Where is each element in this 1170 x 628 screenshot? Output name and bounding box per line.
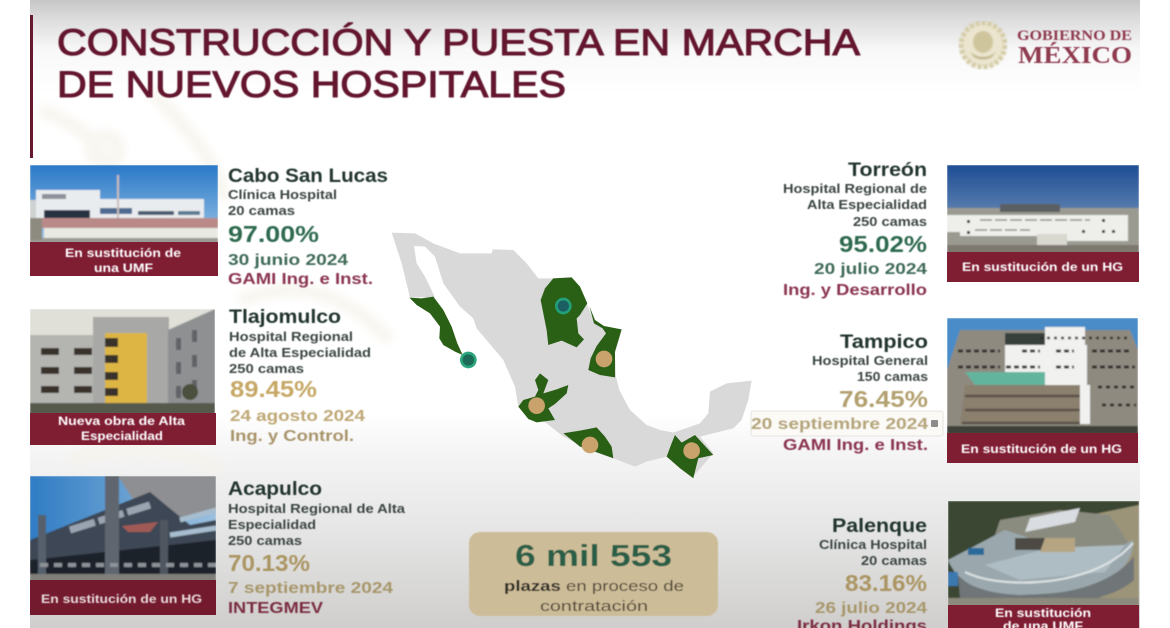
state: Jalisco <box>518 373 568 422</box>
map base <box>392 233 752 477</box>
details <box>797 516 927 628</box>
details: 7 septiembre 2024 <box>228 580 393 597</box>
title: CONSTRUCCIÓN Y PUESTA EN MARCHA <box>57 22 860 63</box>
callout number: 6 mil 553 <box>515 538 672 573</box>
photo: Acapulco hospital <box>30 476 216 581</box>
state: Baja California Sur <box>409 297 463 355</box>
details <box>783 160 927 299</box>
details: 20 julio 2024 <box>814 261 927 278</box>
callout box <box>469 532 718 616</box>
details <box>228 479 406 617</box>
details <box>229 307 371 445</box>
details: 150 camas <box>857 369 928 384</box>
details: 97.00% <box>228 221 319 247</box>
details <box>751 332 928 454</box>
background ornament <box>40 90 390 470</box>
title <box>57 22 860 105</box>
logo: Gobierno de México <box>961 23 1132 69</box>
details: Hospital Regional de <box>783 181 927 196</box>
photo: Palenque hospital <box>948 501 1139 607</box>
details: 95.02% <box>839 231 927 257</box>
caption band <box>30 413 216 445</box>
details: 30 junio 2024 <box>228 252 348 269</box>
marker: Tlajomulco <box>528 397 545 414</box>
title: DE NUEVOS HOSPITALES <box>57 64 566 105</box>
panel: Torreón <box>783 160 1139 299</box>
marker: Torreón <box>555 298 572 314</box>
details: 20 septiembre 2024 <box>751 416 928 433</box>
caption <box>65 246 181 275</box>
details: Hospital Regional de Alta <box>228 501 406 516</box>
photo: Tampico hospital <box>947 318 1138 434</box>
details: Tlajomulco <box>229 307 341 328</box>
logo wordmark: MÉXICO <box>1018 43 1132 69</box>
details: 76.45% <box>839 386 928 412</box>
state: Guerrero <box>563 427 613 458</box>
state: Tamaulipas <box>588 306 622 377</box>
details: Especialidad <box>228 517 316 532</box>
details: GAMI Ing. e Inst. <box>228 271 373 288</box>
logo wordmark <box>1017 28 1132 69</box>
caption band <box>948 605 1139 628</box>
details: 250 camas <box>853 214 927 229</box>
caption <box>58 414 185 443</box>
callout text <box>504 578 684 615</box>
marker: Tampico <box>596 351 612 367</box>
details: Clínica Hospital <box>819 537 927 552</box>
caption band <box>947 252 1139 282</box>
icon: small marker <box>931 420 938 427</box>
details <box>228 166 388 288</box>
details: 20 camas <box>228 203 295 218</box>
details: 26 julio 2024 <box>815 600 927 617</box>
details: 83.16% <box>845 570 927 596</box>
panel: Palenque <box>797 501 1139 628</box>
marker: Cabo San Lucas <box>460 352 477 368</box>
caption band <box>30 580 216 615</box>
details: Acapulco <box>228 479 322 500</box>
details: GAMI Ing. e Inst. <box>783 437 928 454</box>
details: Clínica Hospital <box>228 187 337 202</box>
caption band <box>947 433 1138 463</box>
photo: Torreón hospital <box>947 165 1139 253</box>
details: Alta Especialidad <box>807 197 927 212</box>
panel: Acapulco <box>30 476 406 617</box>
caption: Especialidad <box>81 429 163 443</box>
caption: En sustitución de un HG <box>41 592 202 606</box>
marker: Acapulco <box>582 437 598 453</box>
caption <box>995 606 1091 628</box>
details: 250 camas <box>229 361 304 376</box>
accent bar <box>30 15 33 158</box>
photo: Tlajomulco hospital <box>30 309 215 414</box>
details: Ing. y Desarrollo <box>783 282 927 299</box>
details: Palenque <box>832 516 927 537</box>
caption: En sustitución de un HG <box>962 260 1123 274</box>
details: 24 agosto 2024 <box>230 408 365 425</box>
panel: Tampico <box>751 318 1138 463</box>
details: Ing. y Control. <box>230 428 354 445</box>
map of Mexico <box>392 233 752 478</box>
callout: plazas <box>469 532 718 616</box>
caption band <box>30 242 218 276</box>
details: Hospital Regional <box>229 329 353 344</box>
details: Torreón <box>848 160 927 181</box>
callout text: plazas en proceso de <box>504 578 684 595</box>
photo: Cabo San Lucas hospital <box>30 165 218 243</box>
details: de Alta Especialidad <box>229 345 371 360</box>
caption: una UMF <box>94 261 153 275</box>
icon: national seal <box>961 23 1005 67</box>
details: Tampico <box>840 332 928 353</box>
details: 89.45% <box>230 376 317 402</box>
callout text: contratación <box>540 598 648 615</box>
details: Cabo San Lucas <box>228 166 388 187</box>
panel: Tlajomulco <box>30 307 371 445</box>
state: Coahuila <box>541 277 587 347</box>
highlight box <box>751 411 943 436</box>
panel: Cabo San Lucas <box>30 165 388 288</box>
caption: Nueva obra de Alta <box>58 414 185 428</box>
details: 250 camas <box>228 533 302 548</box>
details: 70.13% <box>228 550 310 576</box>
details: Hospital General <box>812 353 928 368</box>
details: INTEGMEV <box>228 600 323 617</box>
caption: En sustitución de un HG <box>961 442 1122 456</box>
caption: En sustitución <box>995 606 1091 620</box>
logo wordmark: GOBIERNO DE <box>1017 28 1132 44</box>
marker: Palenque <box>683 442 700 459</box>
details: 20 camas <box>861 553 927 568</box>
state: Chiapas <box>667 435 713 478</box>
caption: En sustitución de <box>65 246 181 260</box>
